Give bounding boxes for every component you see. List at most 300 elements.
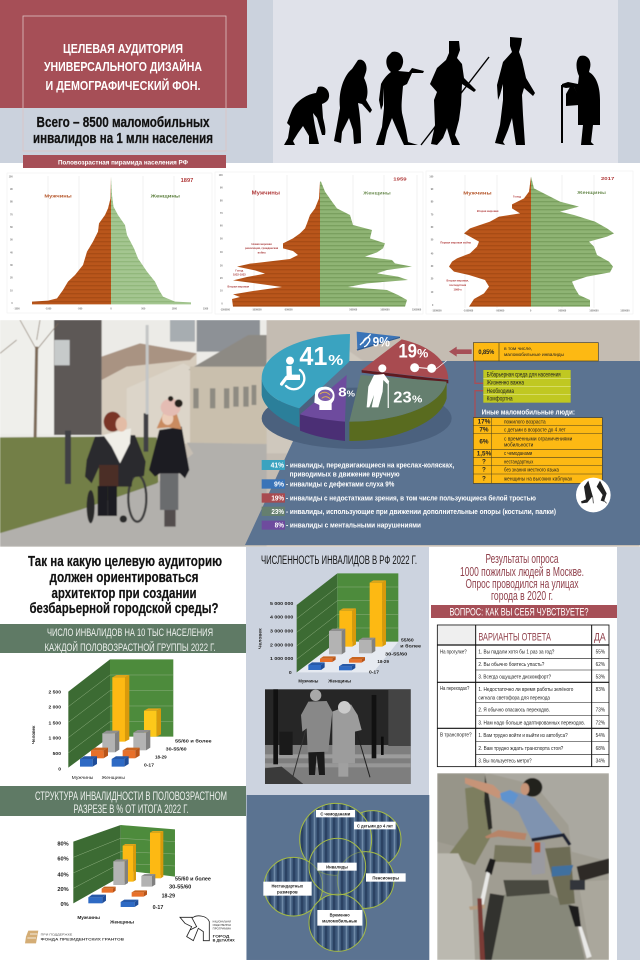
venn circles (264, 803, 401, 951)
table rows: 72% (596, 720, 605, 726)
axis labels: 0% (60, 902, 69, 908)
axis labels: Мужчины (298, 679, 319, 684)
icon: ear (360, 334, 371, 347)
legend item 19%: - инвалиды с недостатками зрения, в том числе пользующиеся белой тростью (286, 494, 536, 502)
legend: disability groups (262, 460, 556, 530)
table: other low-mobility people: с временными ограничениями (504, 436, 572, 442)
label: with children: С детьми до 4 лет (357, 823, 393, 829)
posts (65, 413, 148, 484)
label: with children (354, 822, 396, 829)
axis labels: 1 000 (49, 736, 61, 742)
icon: elderly person with cane (367, 364, 389, 408)
axis labels: Человек (258, 627, 263, 649)
panel: venn diagram of low mobility groups (247, 795, 429, 960)
table rows: 2. Вы обычно боитесь упасть? (478, 662, 544, 668)
chart labels: Первая мировая война (440, 241, 471, 245)
table rows (440, 650, 605, 765)
chart labels: Мужчины (44, 194, 72, 200)
slice: 9% hearing: 9% (373, 334, 390, 350)
slice: 19% vision (362, 339, 448, 379)
bars: 55/60+ (112, 675, 161, 742)
table rows: 3. Нам надо больше адаптированных переходов. (478, 720, 585, 726)
heading bar: population pyramid (23, 155, 226, 168)
chart labels: 70 (220, 213, 223, 215)
axis labels: 60% (57, 856, 69, 862)
callout: 0.85%: в том числе, (504, 346, 532, 352)
list: barrier-free environment: Необходима (487, 387, 514, 395)
chart labels: Голод (235, 269, 244, 273)
title (44, 41, 202, 93)
chart labels (429, 176, 630, 312)
slice: 19% vision: 19 (398, 342, 417, 363)
chart labels: война (258, 250, 266, 254)
chart labels: -1000000 (252, 310, 262, 312)
chart labels: 1500000 (412, 310, 422, 312)
legend item 9% (262, 479, 395, 489)
table: other low-mobility people: 17% (478, 419, 491, 426)
axis labels: Женщины (109, 919, 134, 925)
dark building (54, 320, 102, 435)
axis labels: Мужчины (77, 915, 100, 921)
heading: number of disabled in Russia: ЧИСЛЕННОСТЬ ИНВАЛИДОВ В РФ 2022 Г. (261, 555, 417, 567)
axis labels: и более (400, 643, 421, 650)
chart labels: 0 (432, 305, 434, 307)
venn labels (263, 810, 406, 926)
axis labels: 4 000 000 (270, 615, 294, 621)
chart labels: 100 (429, 176, 434, 178)
silhouette: modern man (495, 37, 535, 145)
female side (111, 177, 191, 304)
heading: target audience question: Так на какую целевую аудиторию (28, 553, 222, 570)
chart walls (297, 573, 337, 672)
chart labels: 2017 (601, 176, 615, 182)
table rows: В транспорте? (440, 733, 472, 739)
list: barrier-free environment: Жизненно важна (487, 380, 524, 387)
axis labels: Мужчины (72, 775, 94, 781)
chart labels: 80 (10, 202, 13, 204)
table rows: сигнала светофора для перехода (478, 695, 551, 701)
chart labels (219, 175, 422, 312)
logo: presidential grants fund: ФОНДА ПРЕЗИДЕНТСКИХ ГРАНТОВ (41, 938, 124, 942)
callout: 0.85%: маломобильные инвалиды (504, 352, 564, 358)
chart labels: 60 (10, 227, 13, 229)
chart labels: 40 (10, 251, 13, 254)
chart labels: 50 (10, 240, 13, 242)
chart labels: 1000 (172, 308, 178, 310)
table: other low-mobility people: ? (482, 458, 486, 465)
table: other low-mobility people: ? (482, 467, 486, 474)
slice: 41% wheelchair users: 41 (299, 341, 327, 371)
head (521, 778, 542, 797)
table rows: 3. Вы пользуетесь метро? (478, 759, 532, 765)
label: disabled (317, 863, 357, 871)
axis labels: 40% (57, 872, 69, 878)
logo: city in details: ПРОГРАММА (213, 926, 231, 930)
logo: presidential grants fund (25, 931, 124, 943)
table: other low-mobility people: мобильности (504, 442, 533, 448)
bars: 30-55/60 (113, 859, 155, 887)
male side (449, 177, 531, 307)
tower and sky (197, 320, 260, 352)
text block: survey results: города в 2020 г. (491, 588, 553, 603)
axis labels: 18-29 (377, 659, 389, 665)
slice: 8% mental: % (347, 389, 355, 399)
table rows: 34% (596, 759, 605, 765)
chart: disability 3D pie (262, 332, 556, 530)
icon: evolution silhouettes (284, 37, 600, 145)
chart labels: 90 (10, 189, 13, 191)
legend item 23%: - инвалиды, использующие при движении дополнительные опоры (костыли, палки) (286, 509, 556, 516)
table: other low-mobility people: 1,5% (477, 450, 492, 457)
chart labels: 10 (431, 292, 434, 294)
tables: low-mobility groups (449, 343, 611, 512)
chart labels: 1500000 (620, 310, 630, 312)
female side (531, 177, 614, 307)
label: non-standard sizes (263, 882, 312, 896)
chart: disability structure 3D bars (25, 825, 236, 943)
chart labels: Женщины (149, 194, 180, 200)
slice: 41% wheelchair users (262, 334, 350, 408)
chart labels: Мужчины (252, 191, 280, 197)
axis labels: Женщины (327, 679, 351, 684)
photo: elderly couple with canes (265, 689, 411, 784)
slice: 9% hearing (357, 332, 400, 351)
chart labels: 0 (530, 310, 532, 312)
slice: 19% vision: % (417, 347, 429, 361)
logo: city in details (180, 916, 236, 943)
legend item 9%: 9% (274, 481, 285, 488)
logo: city in details: ОБЩЕСТВЕННАЯ (213, 923, 231, 927)
legend item 8% (262, 521, 421, 530)
chart labels: Вторая мировая (227, 284, 250, 288)
right margin (617, 547, 640, 960)
rocks (437, 773, 488, 852)
heading band: structure of disability: СТРУКТУРА ИНВАЛИДНОСТИ В ПОЛОВОЗРАСТНОМ (35, 789, 227, 803)
chart labels: 20 (431, 279, 434, 281)
chart labels: 10 (10, 290, 13, 292)
label: temporarily low mobility (317, 910, 362, 926)
legend item 8%: 8% (275, 522, 285, 529)
chart labels: 30 (10, 265, 13, 267)
right buildings (188, 335, 267, 370)
table: other low-mobility people: 7% (479, 427, 489, 434)
axis labels (258, 601, 421, 684)
table rows: На прогулке? (440, 650, 467, 656)
chart labels: 0 (11, 303, 13, 305)
slice: 23% mobility aids: % (412, 394, 422, 405)
axis labels: 1 500 (49, 720, 61, 726)
axis labels: 3 000 000 (270, 629, 294, 635)
chart labels: 500000 (349, 310, 358, 312)
chart labels: 20 (10, 278, 13, 280)
person: girl in pink hat (149, 396, 189, 527)
arms (465, 778, 503, 798)
table rows: 3. Всегда ощущаете дискомфорт? (478, 674, 551, 680)
title: И ДЕМОГРАФИЧЕСКИЙ ФОН. (46, 78, 200, 93)
bars: 30-55/60 (329, 629, 375, 654)
axis labels: Женщины (102, 775, 125, 781)
title: УНИВЕРСАЛЬНОГО ДИЗАЙНА (44, 59, 202, 74)
callout: 0.85%: 0,85% (478, 349, 494, 356)
chart labels: Вторая мировая, (446, 279, 469, 283)
table header: ДА (594, 631, 606, 643)
subtitle: total count: Всего – 8500 маломобильных (36, 114, 210, 131)
chart labels: 90 (431, 189, 434, 191)
chart labels: 50 (431, 240, 434, 242)
axis labels: 500 (53, 751, 61, 757)
panel: evolution silhouettes background (273, 0, 618, 163)
silhouette: hominid (334, 60, 372, 144)
label: non-standard sizes: размеров (277, 889, 298, 895)
chart labels: 1959 (393, 177, 407, 183)
chart labels: 20 (220, 278, 223, 280)
label: non-standard sizes: Нестандартных (271, 884, 303, 890)
header band (0, 0, 640, 163)
axis labels: 30-55/60 (169, 884, 191, 890)
axis labels: 55/60 и более (175, 876, 211, 883)
bars: 18-29 (320, 656, 365, 663)
female side (320, 182, 412, 307)
table header: ВАРИАНТЫ ОТВЕТА (478, 631, 552, 643)
chart labels: 70 (10, 214, 13, 216)
slice: 41% wheelchair users: % (328, 353, 343, 369)
chart labels: 500 (141, 308, 146, 310)
chart labels: 60 (220, 226, 223, 228)
axis labels: Человек (31, 725, 36, 744)
title: ЦЕЛЕВАЯ АУДИТОРИЯ (63, 41, 183, 56)
chart labels: 80 (220, 200, 223, 202)
axis labels: 18-29 (162, 894, 175, 900)
chart labels: Голод (513, 195, 521, 199)
heading: target audience question: архитектор при создании (52, 585, 196, 602)
chart labels: -1500 (14, 308, 20, 310)
bars: 55/60+ (339, 580, 386, 647)
bars: 0-17 (308, 662, 355, 670)
chart labels: последствия (449, 284, 467, 287)
icon: high heels (576, 478, 611, 512)
table: other low-mobility people: без знания местного языка (504, 468, 560, 474)
chart labels: 90 (220, 188, 223, 190)
chart labels: -1500000 (432, 310, 442, 312)
table: other low-mobility people: нестандартных (504, 459, 533, 465)
axis labels (31, 690, 212, 781)
bars: 0-17 (88, 895, 138, 907)
slice: 23% mobility aids: 23 (393, 389, 412, 406)
legend item 41%: приводимых в движение вручную (290, 471, 400, 478)
person: woman in wheelchair (85, 412, 146, 523)
heading band: disabled per 10k (0, 624, 246, 654)
legend item 23% (262, 507, 556, 516)
axis labels: 0-17 (153, 905, 163, 911)
middle column background (246, 547, 429, 785)
list: barrier-free environment (483, 370, 571, 403)
legend item 19%: 19% (271, 495, 285, 502)
legend item 41%: - инвалиды, передвигающиеся на креслах-колясках, (286, 462, 454, 469)
table: other low-mobility people: с чемоданами (504, 451, 532, 457)
silhouette: ape (284, 87, 329, 145)
label: pensioners (366, 873, 406, 882)
chart labels: 30 (431, 266, 434, 268)
heading band: structure of disability (0, 786, 246, 816)
chart labels: -1000 (45, 308, 52, 310)
legend item 23%: 23% (271, 509, 285, 516)
legs (493, 845, 532, 863)
bars: 55/60+ (123, 831, 163, 882)
heading: target audience question: должен ориентироваться (50, 569, 198, 586)
heading band: disabled per 10k: КАЖДОЙ ПОЛОВОЗРАСТНОЙ ГРУППЫ 2022 Г. (44, 641, 216, 654)
table: other low-mobility people: женщины на высоких каблуках (504, 477, 572, 483)
slice: 8% mental: 8 (338, 386, 347, 400)
chart labels: 0 (110, 308, 112, 310)
icon: dark glasses and cane (410, 361, 447, 373)
legend item 41%: 41% (271, 462, 285, 469)
chart labels: 50 (220, 238, 223, 240)
chart: disabled per 10k 3D bars (31, 659, 212, 781)
chart walls (73, 825, 121, 903)
male side (32, 177, 111, 304)
axis labels: 30-55/60 (385, 652, 408, 658)
table: survey answers (437, 625, 609, 767)
table rows: 1. Недостаточно ли время работы зелёного (478, 687, 573, 693)
photo: climber with prosthetic legs (437, 773, 609, 960)
chart labels: -1000000 (463, 310, 474, 312)
middle column lower strip (246, 785, 429, 960)
list: barrier-free environment: Б/барьерная среда для населения (487, 371, 561, 379)
table rows: На переходах? (440, 686, 469, 692)
chart labels: Мужчины (463, 191, 492, 197)
chart: population pyramid 2017 (426, 171, 633, 314)
subtitle: total count: инвалидов на 1 млн населения (33, 130, 213, 147)
axis labels: 30-55/60 (166, 747, 187, 753)
harness (532, 835, 570, 845)
subtitle: total count (33, 114, 213, 147)
bars: 30-55/60 (102, 730, 150, 752)
table rows: 83% (596, 687, 605, 693)
chart: population pyramid 1897 (7, 173, 212, 313)
chart walls (68, 659, 110, 768)
bars: 18-29 (91, 748, 140, 758)
heading: target audience question (28, 553, 222, 617)
axis labels: 2 000 (49, 705, 61, 711)
axis labels: 80% (57, 841, 69, 847)
pie side walls (262, 378, 299, 427)
chart labels: -500000 (496, 310, 505, 312)
chart labels: 30 (220, 265, 223, 267)
slice: 23% mobility aids (349, 364, 447, 422)
chart labels: 10 (220, 291, 223, 293)
photo: woman in wheelchair and girl on a city street (0, 320, 640, 547)
table: other low-mobility people: ? (482, 476, 486, 483)
heading: target audience question: безбарьерной городской среды? (30, 600, 218, 617)
chart labels: Женщины (362, 191, 391, 197)
heading band: structure of disability: РАЗРЕЗЕ В % ОТ ИТОГА 2022 Г. (74, 802, 188, 816)
table rows: 54% (596, 733, 605, 739)
chart labels: 1000000 (589, 310, 599, 312)
callout: 0.85% (473, 343, 598, 361)
label: temporarily low mobility: маломобильные (322, 917, 357, 924)
legend item 9%: - инвалиды с дефектами слуха 9% (286, 481, 395, 488)
panel: blue background behind pie and legends (245, 361, 640, 545)
table rows: 1. Вам трудно войти и выйти из автобуса? (478, 732, 568, 739)
silhouette: hunter with spear (421, 41, 489, 145)
axis labels: 0-17 (369, 670, 379, 676)
axis labels: 1 000 000 (270, 656, 294, 662)
chart labels (9, 176, 209, 310)
table rows: 68% (596, 746, 605, 752)
chart labels: 500000 (558, 310, 567, 312)
title panel (0, 0, 247, 108)
heading bar: population pyramid: Половозрастная пирамида населения РФ (58, 160, 188, 166)
logo: city in details: НАЦИОНАЛЬНАЯ (213, 920, 231, 924)
chart labels: -1500000 (220, 310, 231, 312)
axis labels: 55/60 (401, 638, 414, 644)
table: other low-mobility people: 6% (479, 439, 489, 446)
icon: wheelchair (282, 357, 304, 389)
table rows: 73% (596, 708, 605, 714)
bracket lines (475, 362, 483, 417)
grass (0, 437, 158, 533)
axis labels: 55/60 и более (175, 737, 212, 744)
chart labels: Новая мировая (251, 242, 272, 246)
arrow: to 0.85% box (449, 347, 472, 357)
slice: 8% mental (300, 375, 355, 422)
axis labels (57, 841, 211, 925)
chart labels: 100 (9, 176, 13, 178)
logo: presidential grants fund: ПРИ ПОДДЕРЖКЕ (41, 932, 72, 936)
chart labels: 80 (431, 202, 434, 204)
label: temporarily low mobility: Временно (330, 912, 350, 918)
chart labels: 0 (221, 303, 223, 305)
heading: other people: Иные маломобильные люди: (482, 407, 575, 416)
white building (0, 320, 54, 434)
logo: city in details: В ДЕТАЛЯХ (213, 939, 236, 943)
table rows: 55% (596, 650, 605, 656)
chart labels: -500000 (284, 310, 293, 312)
chart labels: революция, гражданская (245, 247, 279, 250)
chart labels: 100 (219, 175, 223, 177)
chart labels: -500 (78, 308, 83, 310)
axis labels: 18-29 (155, 755, 167, 761)
chart labels: 1932-1933 (233, 273, 246, 277)
chart floor (297, 642, 398, 672)
chart labels: 1000000 (380, 310, 390, 312)
axis labels: 0 (58, 766, 61, 772)
figure: woman (332, 701, 370, 777)
tree (0, 320, 58, 443)
table: other low-mobility people: пожилого возраста (504, 420, 546, 426)
back buildings (102, 343, 197, 445)
left column panel (0, 547, 246, 960)
icon: head with brain (314, 387, 335, 410)
table: other low-mobility people (473, 418, 602, 483)
axis labels: 2 000 000 (270, 643, 294, 649)
chart labels: 1897 (181, 178, 193, 184)
table: other low-mobility people: с детьми в возрасте до 4 лет (504, 428, 566, 434)
label: pensioners: Пенсионеры (372, 875, 399, 881)
text block: survey results (460, 551, 584, 603)
chart labels: Женщины (576, 190, 606, 196)
axis labels: 20% (57, 887, 69, 893)
pie shadow (262, 388, 452, 449)
table rows: 62% (596, 662, 605, 668)
silhouette: figure with stick (376, 52, 424, 145)
chart labels: 60 (431, 227, 434, 229)
legend item 8%: - инвалиды с ментальными нарушениями (286, 522, 421, 529)
chart: disabled total 3D bars (258, 573, 421, 784)
heading band: disabled per 10k: ЧИСЛО ИНВАЛИДОВ НА 10 ТЫС НАСЕЛЕНИЯ (47, 627, 213, 639)
logo: city in details: ГОРОД (213, 935, 230, 939)
axis labels: 0 (289, 670, 292, 676)
